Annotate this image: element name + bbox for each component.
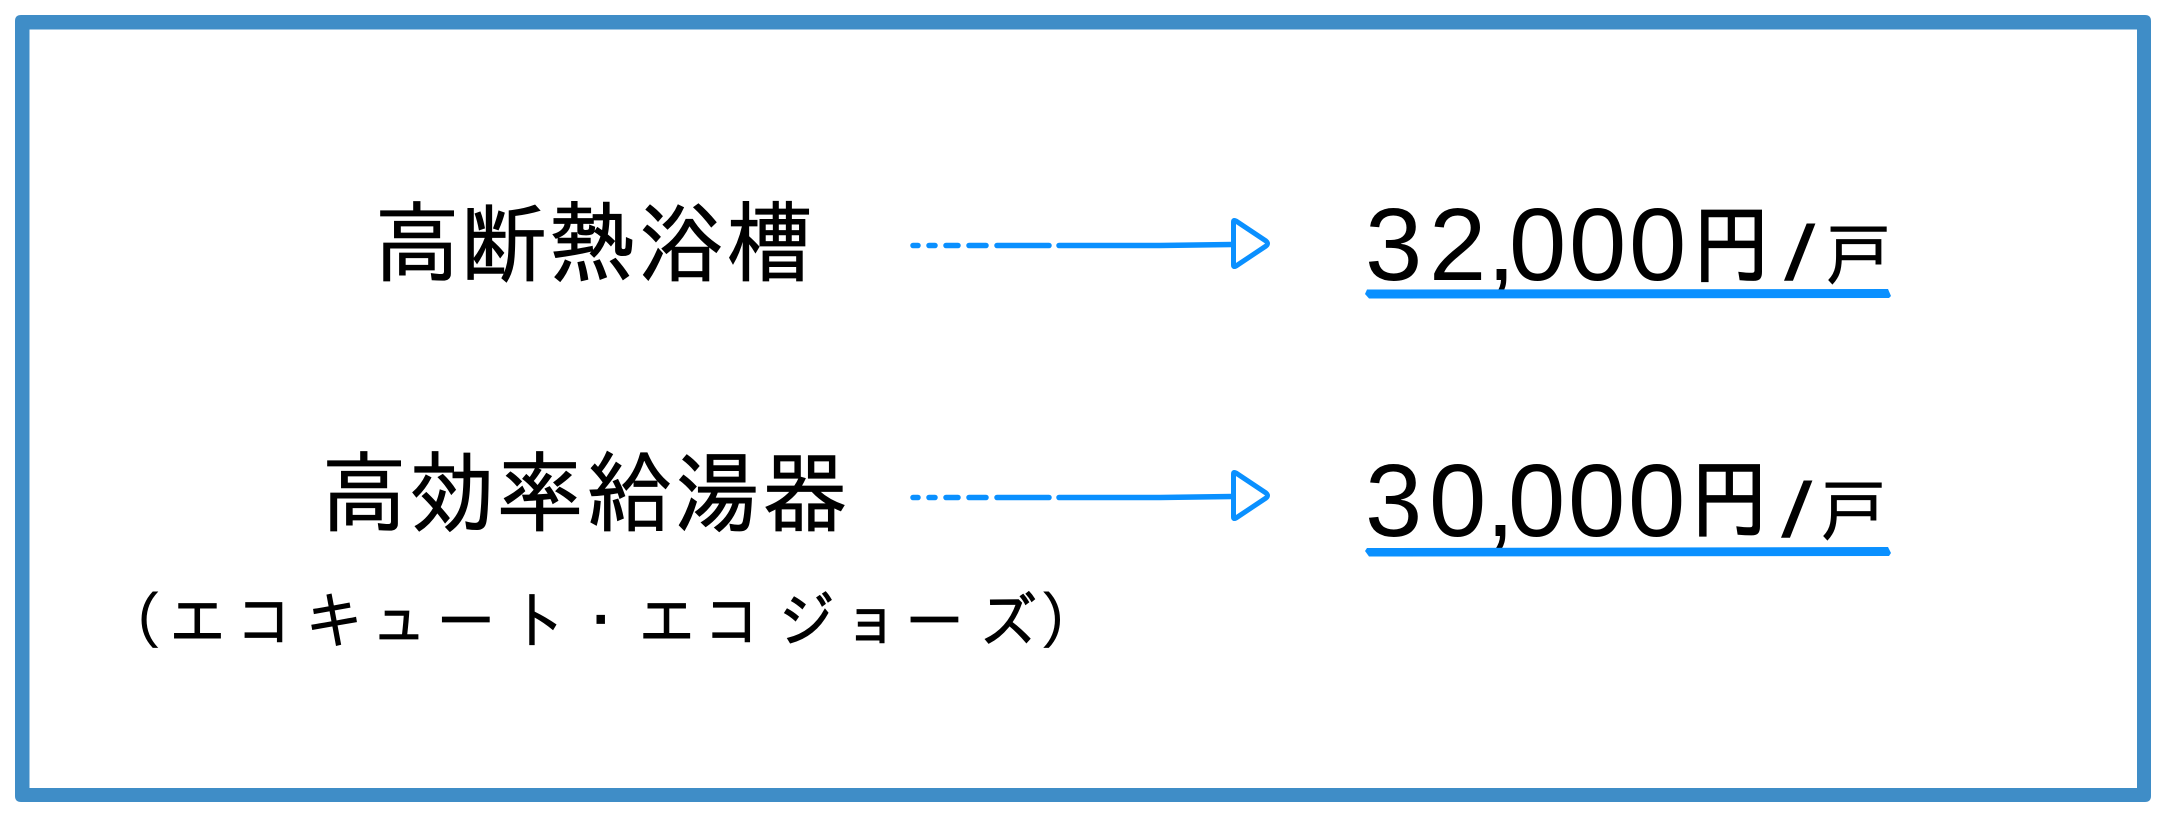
amount: row 2: 30,000 xyxy=(1365,443,1685,558)
amount: row 2: 戸 xyxy=(1819,476,1887,544)
underline: row 2 xyxy=(1365,547,1891,556)
arrow: row 2 xyxy=(913,472,1268,519)
label: high efficiency water heater: 高効率給湯器 xyxy=(321,448,848,536)
amount: row 2 xyxy=(1365,443,1887,558)
amount: row 1: 戸 xyxy=(1824,220,1892,288)
label: high insulation bathtub: 高断熱浴槽 xyxy=(374,198,813,286)
amount: row 1: 円 xyxy=(1692,200,1771,288)
amount: row 1 xyxy=(1365,187,1892,302)
label note: Eco Cute and Eco Jozu: （エコキュート・エコジョーズ） xyxy=(104,589,1097,651)
amount: row 1: / xyxy=(1784,209,1815,297)
amount: row 2: 円 xyxy=(1690,454,1769,543)
arrow: row 1 xyxy=(913,220,1268,267)
amount: row 1: 32,000 xyxy=(1365,187,1686,302)
amount: row 2: / xyxy=(1781,466,1812,554)
underline: row 1 xyxy=(1365,289,1891,298)
